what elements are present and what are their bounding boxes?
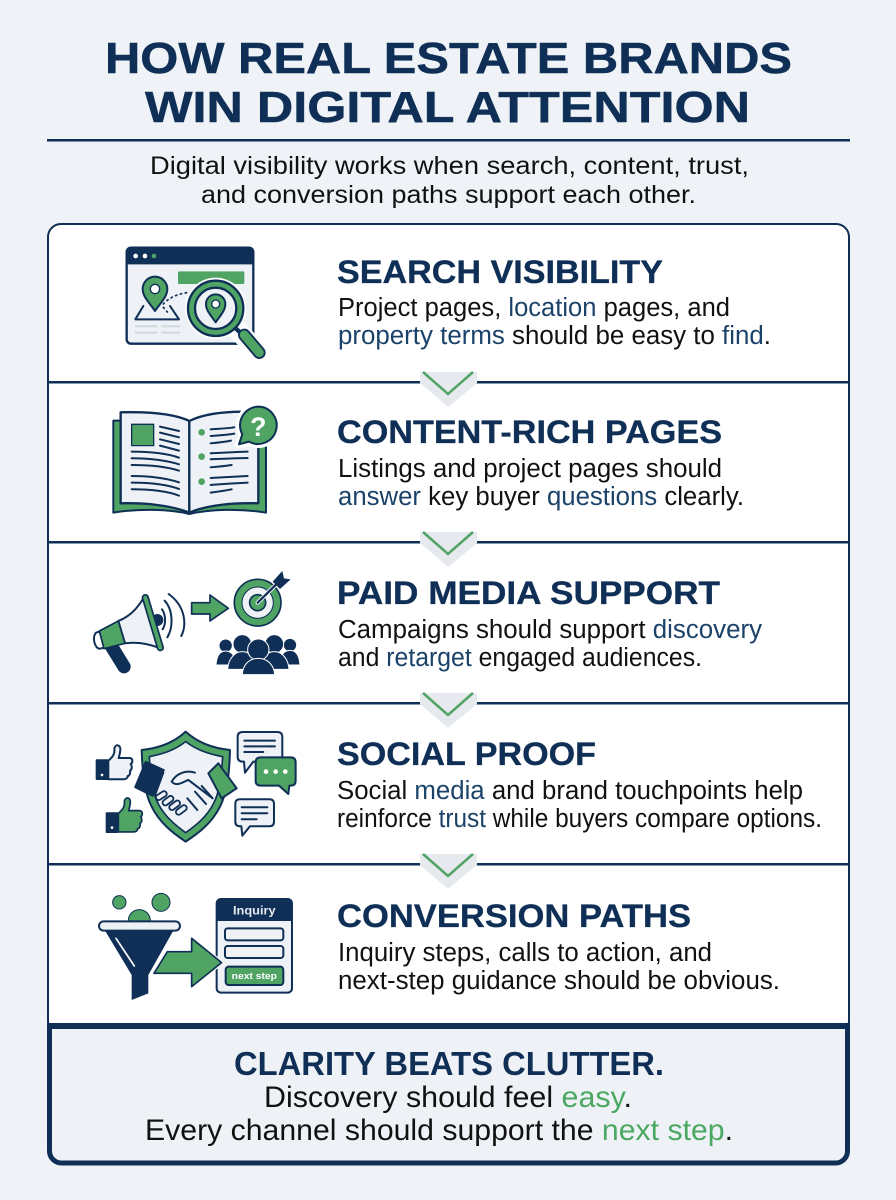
text: paid media support: and retarget engaged audiences. <box>338 644 702 672</box>
hands <box>155 771 213 817</box>
heading: social proof: SOCIAL PROOF <box>337 736 596 772</box>
text: paid media support: Campaigns should support discovery <box>338 616 762 644</box>
title <box>105 34 792 132</box>
footer heading: CLARITY BEATS CLUTTER. <box>234 1045 664 1082</box>
text: paid media support <box>338 616 762 672</box>
heading: search visibility: SEARCH VISIBILITY <box>337 254 663 290</box>
panel: search visibility <box>127 248 771 353</box>
text: conversion paths: Inquiry steps, calls to action, and <box>338 939 712 967</box>
footer text: Every channel should support the next step. <box>145 1114 733 1147</box>
text: conversion paths: next-step guidance should be obvious. <box>338 967 780 995</box>
text: content-rich pages <box>338 455 744 511</box>
text: content-rich pages: answer key buyer questions clearly. <box>338 483 744 511</box>
panel: social proof <box>96 732 822 842</box>
icon: funnel to inquiry form: next step <box>232 971 277 981</box>
panel: main card <box>48 224 849 1034</box>
subtitle: Digital visibility works when search, content, trust, <box>150 152 749 180</box>
heading: content-rich pages: CONTENT-RICH PAGES <box>337 414 722 450</box>
subtitle <box>150 152 749 209</box>
icon: shield, handshake, thumbs and chat <box>96 732 296 842</box>
panel: content-rich pages <box>113 405 744 514</box>
text: social proof: Social media and brand touchpoints help <box>337 777 803 805</box>
icon: open book <box>113 405 278 514</box>
panel: conversion paths <box>99 893 780 1000</box>
arrow: chevron 1 <box>415 360 481 407</box>
panel: paid media support <box>94 571 762 675</box>
icon: megaphone, target and audience <box>94 571 300 675</box>
title: WIN DIGITAL ATTENTION <box>145 83 750 132</box>
text: search visibility <box>338 294 771 350</box>
icon: funnel to inquiry form: Inquiry <box>233 904 276 918</box>
icon: search visibility <box>127 248 260 353</box>
text: search visibility: property terms should be easy to find. <box>338 322 771 350</box>
title: HOW REAL ESTATE BRANDS <box>105 34 792 83</box>
footer text: Discovery should feel easy. <box>264 1081 632 1114</box>
arrow: chevron 2 <box>415 520 481 567</box>
heading: conversion paths: CONVERSION PATHS <box>337 898 691 934</box>
text: conversion paths <box>338 939 780 995</box>
text: social proof: reinforce trust while buyers compare options. <box>337 805 822 833</box>
text: social proof <box>337 777 822 833</box>
text: content-rich pages: Listings and project pages should <box>338 455 722 483</box>
subtitle: and conversion paths support each other. <box>201 181 696 209</box>
icon: funnel to inquiry form <box>99 893 292 1000</box>
arrow: chevron 4 <box>415 842 481 889</box>
heading: paid media support: PAID MEDIA SUPPORT <box>337 575 720 611</box>
arrow: chevron 3 <box>415 681 481 728</box>
icon: open book: ? <box>250 412 266 442</box>
callout: footer <box>47 1023 850 1163</box>
footer text <box>145 1081 733 1147</box>
text: search visibility: Project pages, location pages, and <box>338 294 730 322</box>
